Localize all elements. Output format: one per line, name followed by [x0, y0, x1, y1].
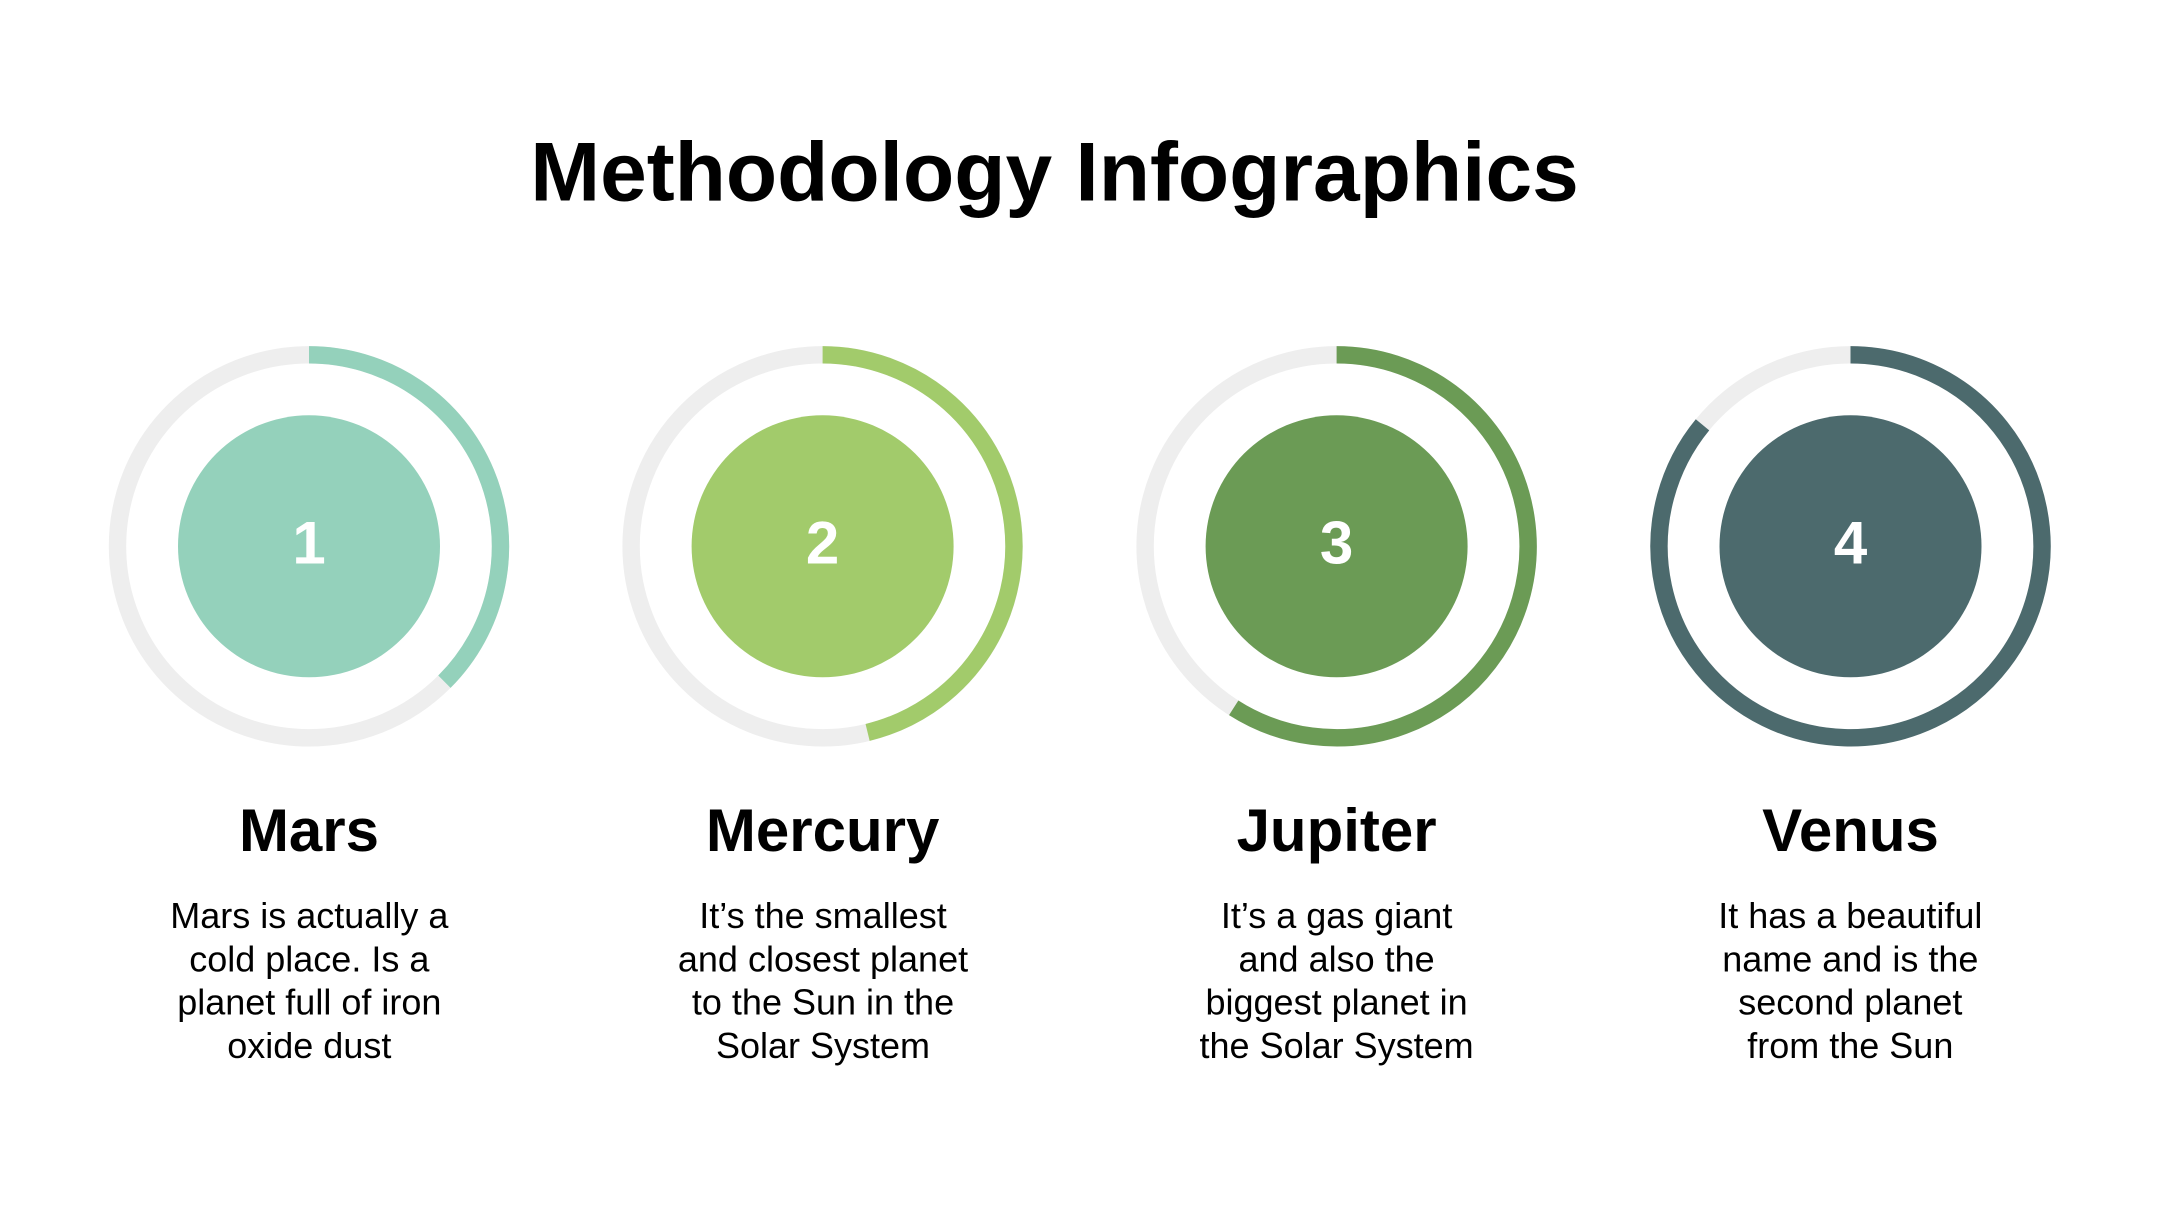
text: Mercury description: and closest planet: [678, 938, 968, 979]
panel: Mercury: [631, 355, 1014, 1066]
text: Venus description: from the Sun: [1747, 1025, 1953, 1066]
progress ring: Mars: [118, 355, 500, 738]
number badge 3: 3: [1320, 510, 1353, 576]
text: Venus description: name and is the: [1722, 938, 1978, 979]
text: Mars description: [170, 895, 449, 1066]
heading: Mercury: Mercury: [706, 797, 940, 864]
heading: Jupiter: Jupiter: [1237, 797, 1437, 864]
text: Mars description: planet full of iron: [177, 982, 441, 1023]
heading: Venus: Venus: [1762, 797, 1939, 864]
number badge 1: 1: [292, 510, 326, 576]
text: Mercury description: Solar System: [716, 1025, 930, 1066]
text: Venus description: It has a beautiful: [1718, 895, 1982, 936]
text: Mercury description: [678, 895, 968, 1066]
number badge 2: [692, 415, 954, 677]
number badge 1: [178, 415, 440, 677]
title: Methodology Infographics: [530, 124, 1579, 218]
panel: Mars: [118, 355, 500, 1066]
number badge 2: 2: [806, 510, 839, 576]
number badge 4: [1720, 415, 1982, 677]
text: Mars description: Mars is actually a: [170, 895, 449, 936]
panel: Jupiter: [1145, 355, 1528, 1066]
text: Mercury description: It’s the smallest: [699, 895, 947, 936]
text: Venus description: [1718, 895, 1982, 1066]
progress ring: Mercury: [631, 355, 1014, 738]
heading: Mars: Mars: [239, 797, 379, 864]
text: Venus description: second planet: [1738, 982, 1962, 1023]
text: Jupiter description: biggest planet in: [1205, 982, 1468, 1023]
number badge 4: 4: [1834, 510, 1868, 576]
text: Mars description: cold place. Is a: [189, 938, 430, 979]
text: Mercury description: to the Sun in the: [692, 982, 954, 1023]
text: Jupiter description: the Solar System: [1200, 1025, 1474, 1066]
text: Jupiter description: and also the: [1239, 938, 1435, 979]
text: Jupiter description: It’s a gas giant: [1221, 895, 1452, 936]
progress ring: Jupiter: [1145, 355, 1528, 738]
text: Jupiter description: [1200, 895, 1474, 1066]
number badge 3: [1206, 415, 1468, 677]
progress ring: Venus: [1659, 355, 2042, 738]
panel: Venus: [1659, 355, 2042, 1066]
text: Mars description: oxide dust: [227, 1025, 391, 1066]
